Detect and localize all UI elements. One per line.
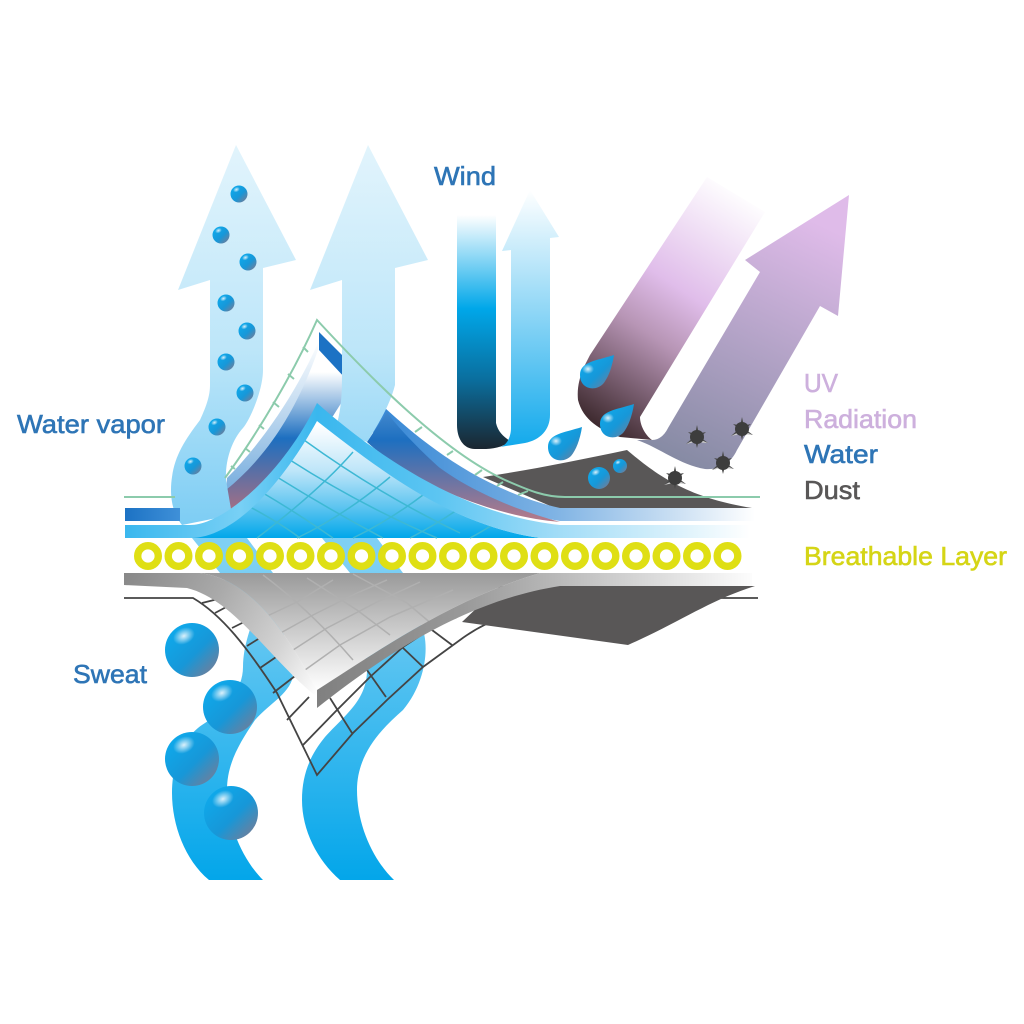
black mesh net lower xyxy=(124,598,758,775)
sweat balls xyxy=(165,623,258,840)
blue middle bar xyxy=(125,508,180,521)
dust particles xyxy=(664,417,753,489)
arrow: wind up xyxy=(500,190,559,447)
label: radiation: Radiation xyxy=(804,404,917,434)
water beads on dust layer xyxy=(588,459,627,489)
blue outer layer left fold xyxy=(226,343,345,515)
dark blue fold corner xyxy=(319,332,345,378)
gray band lower left xyxy=(124,573,317,697)
arrow: UV outgoing xyxy=(637,195,849,469)
gray lip lower right xyxy=(317,573,752,708)
label: water vapor: Water vapor xyxy=(17,409,165,439)
vapor droplets xyxy=(184,186,256,474)
mesh panel upper xyxy=(190,415,540,538)
arrow: water vapor 1 xyxy=(171,145,296,525)
arrow: UV incoming band xyxy=(578,177,765,440)
arrow: wind down xyxy=(457,215,510,449)
label: dust: Dust xyxy=(804,475,861,505)
sweat stream right xyxy=(302,538,426,880)
label: breathable layer: Breathable Layer xyxy=(804,541,1007,571)
label: UV: UV xyxy=(804,368,839,398)
breathable layer rings xyxy=(138,546,738,566)
mesh panel lower xyxy=(200,573,540,690)
dust layer upper xyxy=(483,450,752,508)
green membrane line upper xyxy=(124,320,760,497)
label: sweat: Sweat xyxy=(73,659,148,689)
sweat stream left xyxy=(172,538,293,880)
label: water: Water xyxy=(804,439,878,469)
light blue swoosh band xyxy=(125,403,750,538)
label: wind: Wind xyxy=(434,161,496,191)
blue outer layer right xyxy=(367,408,755,522)
dust layer lower xyxy=(462,586,755,645)
arrow: water vapor 2 xyxy=(310,145,428,442)
water drops xyxy=(548,355,634,460)
